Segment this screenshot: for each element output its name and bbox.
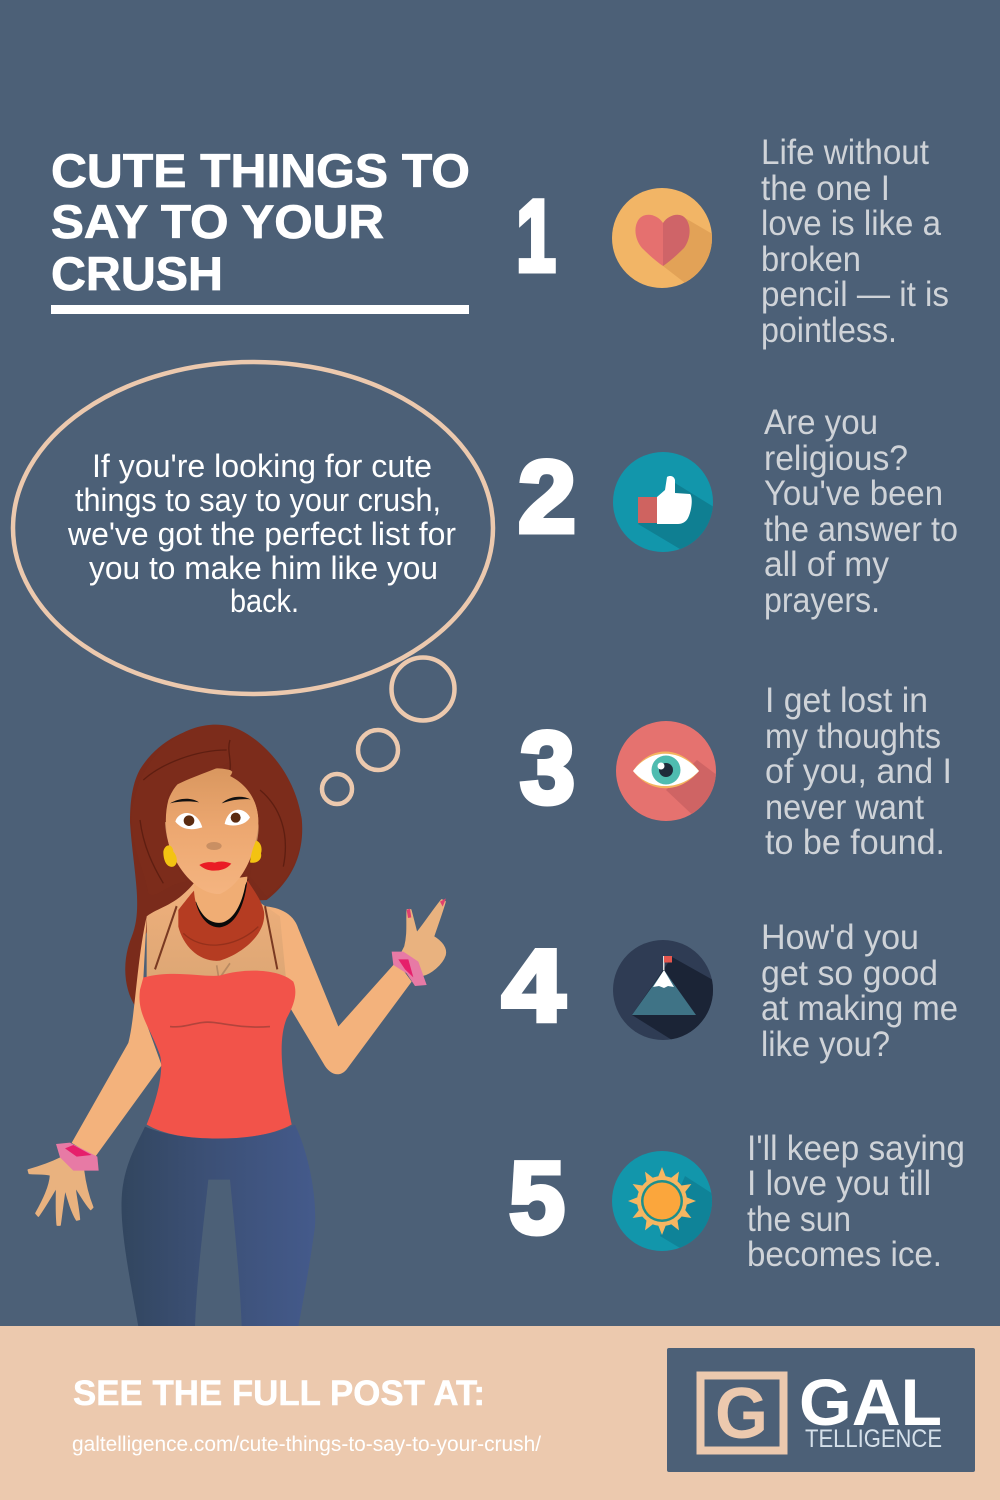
text 2: religious? (764, 439, 908, 478)
eyebrows (170, 797, 251, 803)
text 3 (765, 681, 952, 862)
text 4 (761, 918, 958, 1064)
hair front (132, 725, 302, 897)
footer call to action: SEE THE FULL POST AT: (73, 1374, 485, 1413)
text 3: my thoughts (765, 717, 941, 756)
logo: GAL (799, 1365, 942, 1439)
intro text (67, 448, 456, 619)
text 1: pointless. (761, 311, 897, 350)
text 2: You've been (764, 474, 943, 513)
logo: TELLIGENCE (805, 1425, 942, 1453)
earrings (163, 841, 262, 867)
intro text: you to make him like you (89, 550, 438, 586)
text 1 (761, 133, 949, 350)
text 1: the one I (761, 169, 890, 208)
head and scarf (132, 725, 302, 961)
text 5: becomes ice. (747, 1235, 942, 1274)
top seam (170, 1022, 270, 1027)
icon: eye (616, 721, 716, 821)
nose (206, 842, 222, 850)
text 4: How'd you (761, 918, 919, 957)
intro text: back. (230, 583, 299, 619)
neck (194, 877, 247, 928)
jeans (121, 1124, 315, 1327)
text 2: all of my (764, 545, 889, 584)
text 5: the sun (747, 1200, 851, 1239)
text 2: Are you (764, 403, 878, 442)
text 1: pencil — it is (761, 275, 949, 314)
number 4: 4 (502, 929, 565, 1043)
left arm (72, 916, 162, 1157)
scrunchie (56, 1143, 99, 1171)
icon: heart (612, 188, 712, 288)
text 2: the answer to (764, 510, 958, 549)
text 1: love is like a (761, 204, 942, 243)
text 1: broken (761, 240, 861, 279)
text 4: get so good (761, 954, 938, 993)
intro text: If you're looking for cute (92, 448, 432, 484)
intro text: we've got the perfect list for (67, 516, 456, 552)
hair shine (140, 740, 285, 883)
body (72, 726, 412, 1327)
title (51, 144, 470, 314)
scarf (178, 880, 264, 961)
text 1: Life without (761, 133, 929, 172)
footer url: galtelligence.com/cute-things-to-say-to-your-crush/ (72, 1433, 541, 1456)
necklace (217, 963, 230, 986)
straps (155, 906, 277, 969)
nails (407, 898, 446, 918)
chest (147, 880, 287, 986)
top (139, 971, 295, 1139)
icon: sun (612, 1151, 712, 1251)
text 3: never want (765, 788, 924, 827)
right hand (392, 898, 446, 986)
face (166, 768, 259, 894)
title: CUTE THINGS TO (51, 144, 470, 197)
long hair (125, 726, 302, 1008)
eyes (175, 810, 250, 829)
icon: mountain (613, 940, 713, 1040)
text 5 (747, 1129, 965, 1274)
text 4: at making me (761, 989, 958, 1028)
number 1: 1 (516, 179, 556, 293)
number 3: 3 (520, 711, 575, 825)
text 3: I get lost in (765, 681, 928, 720)
text 2 (764, 403, 958, 620)
right arm (260, 906, 412, 1074)
number 2: 2 (518, 440, 576, 554)
left hand (28, 1143, 99, 1225)
text 5: I'll keep saying (747, 1129, 965, 1168)
text 2: prayers. (764, 581, 880, 620)
thought bubble (13, 362, 493, 804)
scrunchie (392, 952, 427, 986)
icon: thumbs up (613, 452, 713, 552)
number 5: 5 (509, 1141, 565, 1255)
scarf fold (183, 927, 258, 945)
logo (667, 1348, 975, 1472)
title: SAY TO YOUR (51, 195, 384, 248)
title: CRUSH (51, 247, 223, 300)
ears (161, 817, 262, 848)
illustration: woman pointing (28, 725, 446, 1327)
intro text: things to say to your crush, (75, 482, 441, 518)
logo: G (715, 1374, 768, 1454)
text 4: like you? (761, 1025, 890, 1064)
neck shadow (193, 878, 248, 930)
footer band (0, 1326, 1000, 1500)
text 5: I love you till (747, 1164, 931, 1203)
text 3: of you, and I (765, 752, 952, 791)
lips (199, 861, 231, 871)
text 3: to be found. (765, 823, 945, 862)
